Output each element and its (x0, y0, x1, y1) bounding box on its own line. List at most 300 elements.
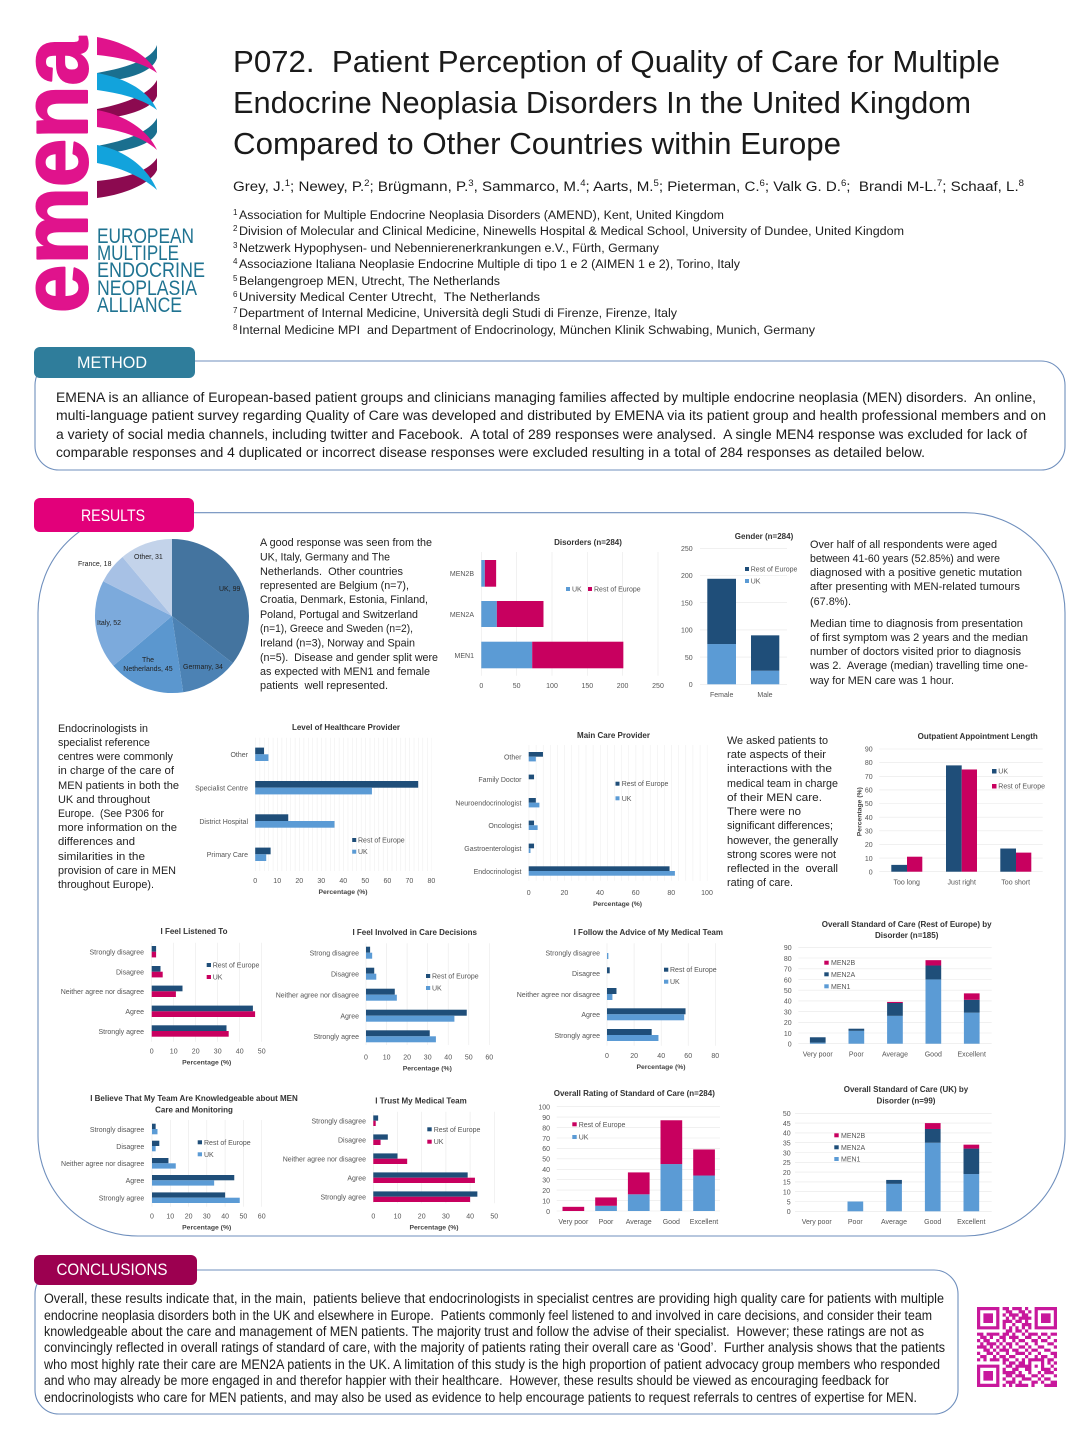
affiliations: Division of Molecular and Clinical Medicine, Ninewells Hospital & Medical School, University of Dundee, United Kingdom (239, 224, 904, 238)
conclusions text: endocrine neoplasia disorders both in the UK and elsewhere in Europe. Patients commonly feel listened to and involved in care decisions, and consider their team (44, 1308, 932, 1323)
chart: overall standard of care, UK: Very poor (802, 1219, 832, 1226)
chart: my team are knowledgeable: Percentage (%) (182, 1224, 231, 1232)
affiliations: University Medical Center Utrecht, The Netherlands (239, 290, 540, 304)
chart: disorders: 100 (546, 683, 558, 690)
pie chart: responses by country: Other, 31 (134, 554, 163, 561)
chart: overall standard of care, UK: 50 (783, 1111, 791, 1118)
method text: EMENA is an alliance of European-based patient groups and clinicians managing families affected by multiple endocrine neoplasia (MEN) disorders. An online, (56, 390, 1036, 405)
chart: overall standard of care, UK: MEN2B (841, 1133, 865, 1140)
chart: I trust my medical team: 30 (442, 1214, 450, 1220)
chart: overall rating of standard of care: 50 (542, 1157, 550, 1164)
chart: overall standard of care, UK: 35 (783, 1140, 791, 1148)
authors: 6 (841, 178, 846, 188)
chart: overall standard of care, UK: 30 (783, 1150, 791, 1157)
chart: overall rating of standard of care: UK (579, 1134, 589, 1142)
chart: I feel involved in care decisions: Strong disagree (310, 950, 359, 958)
chart: I follow the advice of my medical team: Rest of Europe (670, 967, 717, 974)
authors: 5 (654, 178, 659, 188)
logo text (97, 225, 205, 317)
authors: 8 (1019, 178, 1024, 188)
logo wordmark: emena (2, 36, 107, 313)
authors: ; Valk G. D. (765, 179, 841, 195)
chart: overall standard of care, UK: 10 (783, 1190, 791, 1196)
chart: my team are knowledgeable: I Believe That My Team Are Knowledgeable about MEN (90, 1094, 298, 1103)
chart: overall standard of care, rest of Europe: 70 (784, 967, 792, 974)
text: endocrinologists: more information on the (58, 822, 177, 834)
chart: my team are knowledgeable: 50 (240, 1214, 247, 1220)
chart: main care provider: 40 (596, 890, 604, 897)
authors: 7 (937, 178, 942, 188)
chart: outpatient appointment length: UK (998, 769, 1008, 776)
chart: I trust my medical team: I Trust My Medical Team (375, 1096, 467, 1106)
chart: I follow the advice of my medical team (517, 928, 723, 1071)
text: demographics: was 2. Average (median) travelling time one- (809, 660, 1028, 672)
chart: overall rating of standard of care: Excellent (690, 1219, 718, 1226)
method text (56, 390, 1046, 460)
chart: outpatient appointment length: 90 (865, 746, 873, 754)
logo: EMENA (2, 36, 205, 317)
chart: I feel involved in care decisions: 50 (465, 1054, 473, 1062)
chart: overall standard of care, rest of Europe: 40 (784, 999, 792, 1006)
chart: overall rating of standard of care: Average (626, 1219, 652, 1226)
chart: my team are knowledgeable: Agree (126, 1178, 144, 1185)
text: response summary: (n=5). Disease and gender split were (260, 652, 438, 664)
chart: my team are knowledgeable: 10 (166, 1214, 174, 1220)
chart: I follow the advice of my medical team: 80 (711, 1053, 719, 1060)
chart: level of healthcare provider: 30 (317, 878, 325, 885)
chart: main care provider: Main Care Provider (577, 731, 650, 740)
chart: overall rating of standard of care: 30 (542, 1178, 550, 1184)
panel: results (34, 498, 1065, 1236)
chart: I follow the advice of my medical team: 60 (684, 1053, 692, 1060)
chart: my team are knowledgeable: Care and Monitoring (155, 1106, 233, 1115)
text: rating aspects of care: rate aspects of their (727, 749, 826, 761)
chart: I follow the advice of my medical team: Percentage (%) (636, 1064, 686, 1071)
title: P072. Patient Perception of Quality of Care for Multiple (233, 44, 1000, 79)
chart: overall rating of standard of care: 40 (542, 1167, 550, 1174)
chart: main care provider: 0 (527, 890, 531, 897)
chart: my team are knowledgeable: 30 (203, 1214, 211, 1220)
chart: I feel involved in care decisions: 0 (364, 1054, 368, 1062)
chart: I feel involved in care decisions: Neither agree nor disagree (276, 992, 359, 1000)
chart: I trust my medical team: 10 (394, 1214, 401, 1220)
chart: disorders: 0 (479, 683, 483, 690)
chart: I feel involved in care decisions: I Feel Involved in Care Decisions (352, 928, 477, 937)
chart: I feel listened to: I Feel Listened To (161, 927, 228, 936)
chart: my team are knowledgeable: Neither agree nor disagree (61, 1161, 144, 1168)
method heading tab: METHOD (77, 353, 147, 372)
chart: main care provider: Family Doctor (478, 777, 522, 784)
chart: overall standard of care, UK: Disorder (n=99) (877, 1096, 936, 1106)
chart: overall standard of care, UK: 15 (783, 1180, 791, 1187)
affiliations: 7 (233, 306, 238, 315)
authors: 1 (285, 178, 290, 188)
chart: gender: 100 (681, 628, 693, 634)
chart: overall standard of care, UK: Poor (848, 1219, 863, 1226)
text: endocrinologists: MEN patients in both the (58, 780, 179, 792)
text: endocrinologists: UK and throughout (58, 794, 151, 806)
chart: outpatient appointment length: Too long (893, 880, 920, 887)
chart: I follow the advice of my medical team: UK (670, 979, 680, 986)
text: demographics: after presenting with MEN-related tumours (810, 581, 1020, 593)
chart: I feel listened to: 30 (214, 1048, 222, 1056)
chart: overall standard of care, UK: Excellent (957, 1219, 986, 1226)
authors: 4 (580, 178, 586, 188)
conclusions heading tab (34, 1255, 197, 1285)
chart: gender: UK (751, 578, 761, 586)
affiliations: 5 (233, 274, 238, 283)
chart: I follow the advice of my medical team: Neither agree nor disagree (517, 992, 600, 999)
chart: overall standard of care, rest of Europe: 90 (784, 945, 792, 952)
text: rating aspects of care: interactions with the (727, 763, 832, 775)
text: rating aspects of care: rating of care. (727, 877, 793, 889)
conclusions text: and who may already be more engaged in and therefor happier with their healthcare. However, these results should be viewed as encouraging feedback for (44, 1373, 889, 1388)
title: Endocrine Neoplasia Disorders In the United Kingdom (233, 85, 971, 120)
chart: overall standard of care, rest of Europe: Good (925, 1052, 942, 1058)
chart: overall standard of care, rest of Europe (784, 920, 992, 1058)
chart: overall rating of standard of care: Poor (599, 1219, 614, 1226)
method text: multi-language patient survey regarding Quality of Care was developed and distributed by EMENA via its patient group and health professional members and on (56, 408, 1046, 423)
chart: I trust my medical team: Strongly agree (320, 1194, 366, 1202)
chart: I trust my medical team (283, 1096, 498, 1232)
chart: I feel listened to (61, 927, 266, 1066)
chart: overall standard of care, UK: MEN2A (841, 1145, 865, 1152)
chart: main care provider: 20 (561, 890, 568, 897)
chart: I trust my medical team: Strongly disagree (312, 1118, 366, 1126)
chart: my team are knowledgeable: Rest of Europe (204, 1140, 251, 1147)
chart: overall rating of standard of care: 80 (542, 1125, 550, 1132)
panel: conclusions (34, 1255, 958, 1414)
conclusions text: convincingly reflected in overall ratings of standard of care, with the majority of patients rating their overall care as ‘Good’. Further analysis shows that the patients (44, 1340, 945, 1355)
affiliations: 2 (233, 224, 238, 233)
text: response summary (260, 537, 438, 692)
chart: outpatient appointment length: Outpatient Appointment Length (918, 732, 1038, 741)
chart: overall standard of care, rest of Europe: 80 (784, 956, 792, 963)
chart: overall standard of care, rest of Europe: 50 (784, 988, 792, 995)
authors: ; Pieterman, C. (659, 179, 760, 195)
chart: I trust my medical team: Percentage (%) (409, 1224, 459, 1232)
chart: I feel listened to: Rest of Europe (213, 962, 259, 970)
chart: level of healthcare provider: 60 (384, 878, 391, 885)
chart: overall standard of care, UK: MEN1 (841, 1156, 861, 1164)
authors: ; Schaaf, L. (942, 179, 1019, 195)
text: response summary: patients well represented. (260, 680, 388, 692)
chart: my team are knowledgeable (61, 1094, 298, 1232)
chart: outpatient appointment length: 80 (865, 760, 873, 767)
chart: main care provider: 60 (632, 890, 640, 897)
logo text: ENDOCRINE (97, 259, 205, 282)
chart: my team are knowledgeable: UK (204, 1152, 214, 1159)
chart: overall standard of care, rest of Europe: 60 (784, 977, 792, 984)
chart: overall rating of standard of care: 100 (538, 1104, 550, 1112)
chart: I feel involved in care decisions: Rest of Europe (432, 974, 479, 980)
chart: I feel listened to: Strongly disagree (90, 950, 144, 956)
chart: level of healthcare provider: 80 (428, 878, 435, 885)
chart: outpatient appointment length: Percentage (%) (856, 787, 864, 836)
chart: overall standard of care, UK: 5 (787, 1199, 791, 1206)
chart: main care provider: Endocrinologist (474, 869, 522, 876)
chart: I feel involved in care decisions: Strongly agree (313, 1034, 359, 1041)
chart: overall standard of care, rest of Europe: Excellent (957, 1052, 986, 1058)
chart: overall rating of standard of care: 90 (542, 1115, 550, 1122)
affiliations: 8 (233, 323, 238, 332)
chart: gender (681, 532, 797, 699)
chart: outpatient appointment length: Just right (947, 880, 976, 887)
chart: overall rating of standard of care: 20 (542, 1188, 550, 1195)
conclusions text: knowledgeable about the care and management of MEN patients. The majority trust and follow the advise of their specialist. However; these ratings are not as (44, 1324, 924, 1339)
text: demographics: of first symptom was 2 years and the median (810, 632, 1028, 644)
chart: I feel involved in care decisions: Disagree (331, 972, 359, 978)
chart: gender: 250 (681, 546, 693, 553)
text: demographics: number of doctors visited prior to diagnosis (810, 646, 1021, 658)
text: demographics: diagnosed with a positive genetic mutation (810, 567, 1022, 579)
authors: 2 (364, 178, 370, 188)
logo helix (97, 37, 157, 198)
title (233, 44, 1000, 161)
chart: overall standard of care, UK: Overall Standard of Care (UK) by (844, 1085, 969, 1094)
authors: 3 (468, 178, 474, 188)
chart: disorders: MEN2B (450, 571, 474, 578)
chart: overall standard of care, rest of Europe: 10 (784, 1031, 792, 1038)
affiliations: Netzwerk Hypophysen- und Nebennierenerkrankungen e.V., Fürth, Germany (239, 241, 660, 255)
text: rating aspects of care: however, the generally (727, 835, 838, 847)
chart: my team are knowledgeable: Disagree (116, 1144, 144, 1151)
chart: I trust my medical team: 0 (371, 1214, 375, 1220)
chart: my team are knowledgeable: 0 (150, 1214, 154, 1220)
text: demographics: Median time to diagnosis from presentation (810, 618, 1023, 630)
chart: overall rating of standard of care: Good (663, 1219, 680, 1226)
affiliations: Associazione Italiana Neoplasie Endocrine Multiple di tipo 1 e 2 (AIMEN 1 e 2), Torino, Italy (239, 257, 741, 271)
chart: overall rating of standard of care (538, 1089, 720, 1226)
text: demographics (809, 539, 1028, 687)
conclusions text: endocrinologists who care for MEN patients, and may also be used as evidence to help encourage patients to request referrals to centres of expertise for MEN. (44, 1390, 917, 1405)
chart: I feel listened to: Disagree (116, 970, 144, 976)
chart: I feel involved in care decisions: Agree (340, 1014, 359, 1020)
chart: I feel listened to: Strongly agree (98, 1029, 144, 1036)
chart: level of healthcare provider: 40 (339, 878, 347, 885)
chart: I follow the advice of my medical team: I Follow the Advice of My Medical Team (574, 928, 723, 937)
chart: I trust my medical team: 40 (466, 1214, 474, 1220)
text: rating aspects of care: There were no (727, 806, 801, 818)
chart: disorders: 250 (652, 683, 664, 690)
pie chart: responses by country: Germany, 34 (183, 664, 223, 671)
chart: main care provider: Neuroendocrinologist (455, 800, 522, 808)
chart: I follow the advice of my medical team: 0 (605, 1053, 609, 1060)
chart: gender: Male (757, 692, 773, 699)
chart: disorders: MEN1 (455, 653, 474, 660)
text: demographics: between 41-60 years (52.85%) and were (810, 553, 1000, 565)
text: rating aspects of care: significant differences; (727, 820, 833, 832)
chart: level of healthcare provider: District Hospital (199, 819, 248, 826)
chart: overall standard of care, rest of Europe: Disorder (n=185) (875, 931, 939, 940)
authors: 6 (760, 178, 765, 188)
text: response summary: Poland, Portugal and Switzerland (260, 609, 418, 621)
chart: I feel involved in care decisions: 30 (424, 1054, 432, 1062)
chart: outpatient appointment length: Rest of Europe (998, 784, 1045, 791)
affiliations: 4 (233, 257, 238, 266)
chart: main care provider: UK (622, 796, 632, 803)
chart: disorders: UK (572, 586, 582, 594)
chart: I follow the advice of my medical team: 20 (630, 1053, 638, 1060)
text: demographics: Over half of all respondents were aged (810, 539, 997, 551)
chart: I feel listened to: 20 (192, 1048, 200, 1056)
chart: I feel listened to: Percentage (%) (182, 1060, 231, 1066)
chart: overall standard of care, UK: 20 (783, 1170, 791, 1177)
chart: I feel listened to: 10 (170, 1048, 178, 1056)
chart: overall standard of care, rest of Europe: Overall Standard of Care (Rest of Europe) by (822, 920, 992, 929)
authors: ; Brandi M-L. (846, 179, 937, 195)
chart: level of healthcare provider: Specialist Centre (195, 786, 248, 792)
chart: I trust my medical team: Disagree (338, 1138, 366, 1144)
chart: my team are knowledgeable: 20 (185, 1214, 193, 1220)
authors: Grey, J. (233, 179, 282, 195)
chart: level of healthcare provider: Level of Healthcare Provider (292, 723, 400, 732)
text: rating aspects of care: reflected in the overall (727, 863, 838, 875)
chart: gender: 0 (689, 682, 693, 689)
chart: overall standard of care, rest of Europe: 20 (784, 1020, 792, 1027)
chart: disorders: 200 (617, 683, 629, 690)
chart: I trust my medical team: 50 (490, 1214, 498, 1220)
chart: I feel involved in care decisions: 20 (403, 1054, 411, 1062)
text: response summary: Ireland (n=3), Norway and Spain (260, 638, 415, 650)
chart: outpatient appointment length: 60 (865, 788, 873, 794)
text: endocrinologists: Endocrinologists in (58, 723, 148, 735)
chart: my team are knowledgeable: 60 (258, 1214, 266, 1220)
panel: method (34, 347, 1065, 470)
text: response summary: Croatia, Denmark, Estonia, Finland, (260, 594, 428, 606)
chart: I trust my medical team: Rest of Europe (434, 1127, 480, 1134)
chart: overall standard of care, UK: 0 (787, 1209, 791, 1216)
chart: overall standard of care, UK: 25 (783, 1160, 791, 1167)
chart: disorders (450, 538, 664, 690)
icon: QR code (977, 1307, 1057, 1387)
chart: I feel listened to: Agree (125, 1009, 144, 1016)
affiliations: 1 (233, 208, 238, 217)
logo text: ALLIANCE (97, 294, 182, 317)
conclusions text: Overall, these results indicate that, in the main, patients believe that endocrinologists in specialist centres are providing high quality care for patients with multiple (44, 1291, 944, 1306)
affiliations: 6 (233, 290, 238, 299)
chart: outpatient appointment length: 10 (865, 856, 873, 863)
chart: I feel listened to: Neither agree nor disagree (61, 989, 144, 996)
results heading tab: RESULTS (81, 506, 145, 525)
chart: level of healthcare provider: Primary Care (207, 852, 248, 859)
chart: I feel listened to: 0 (150, 1048, 154, 1056)
chart: gender: 150 (681, 600, 693, 608)
chart: overall rating of standard of care: 0 (546, 1209, 550, 1216)
chart: overall standard of care, UK (783, 1085, 992, 1226)
text: rating aspects of care: strong scores were not (727, 849, 837, 861)
chart: overall rating of standard of care: 70 (542, 1136, 550, 1143)
chart: gender: 200 (681, 573, 693, 580)
chart: I trust my medical team: Neither agree nor disagree (283, 1156, 366, 1164)
chart: overall standard of care, rest of Europe: 30 (784, 1009, 792, 1016)
authors: ; Aarts, M. (586, 179, 654, 195)
text: rating aspects of care: of their MEN care. (727, 792, 822, 804)
conclusions heading tab: CONCLUSIONS (56, 1260, 168, 1279)
text: endocrinologists: centres were commonly (58, 751, 173, 763)
text: demographics: way for MEN care was 1 hour. (809, 675, 954, 687)
chart: main care provider: 100 (701, 890, 713, 897)
affiliations: Internal Medicine MPI and Department of Endocrinology, München Klinik Schwabing, Munich, Germany (239, 323, 816, 337)
chart: outpatient appointment length: 20 (865, 842, 873, 849)
chart: level of healthcare provider: 10 (273, 878, 281, 885)
chart: overall standard of care, rest of Europe: MEN2A (831, 972, 855, 979)
chart: overall standard of care, UK: Good (924, 1219, 941, 1226)
text: endocrinologists: differences and (58, 836, 135, 848)
chart: main care provider (455, 731, 713, 908)
chart: outpatient appointment length: 30 (865, 828, 873, 836)
chart: I follow the advice of my medical team: Strongly disagree (546, 950, 600, 958)
chart: my team are knowledgeable: 40 (221, 1214, 229, 1220)
text: endocrinologists (58, 723, 179, 891)
chart: I follow the advice of my medical team: Agree (581, 1012, 600, 1019)
pie chart: responses by country (78, 539, 249, 693)
text: rating aspects of care: We asked patients to (727, 735, 828, 747)
text: endocrinologists: Europe. (See P306 for (58, 808, 164, 820)
text: endocrinologists: similarities in the (58, 851, 145, 863)
chart: disorders: 50 (513, 683, 521, 690)
chart: level of healthcare provider (195, 723, 435, 896)
conclusions text: who most highly rate their care are MEN2A patients in the UK. A limitation of this study is the high proportion of patient advocacy group members who responded (43, 1357, 940, 1372)
authors: ; Brügmann, P. (370, 179, 468, 195)
chart: main care provider: Rest of Europe (622, 781, 668, 788)
text: response summary: Netherlands. Other countries (260, 566, 403, 578)
chart: overall standard of care, rest of Europe: Very poor (803, 1052, 833, 1058)
text: demographics: (67.8%). (810, 596, 851, 608)
chart: overall rating of standard of care: Overall Rating of Standard of Care (n=284) (554, 1089, 715, 1098)
logo text: NEOPLASIA (97, 277, 197, 300)
chart: overall standard of care, UK: 40 (783, 1131, 791, 1138)
chart: outpatient appointment length: Too short (1001, 880, 1030, 887)
chart: outpatient appointment length: 50 (865, 801, 873, 808)
text: endocrinologists: in charge of the care of (58, 765, 175, 777)
text: response summary: A good response was seen from the (260, 537, 432, 549)
text: response summary: represented are Belgium (n=7), (260, 580, 409, 592)
chart: disorders: Disorders (n=284) (554, 538, 622, 547)
chart: I feel involved in care decisions: UK (432, 986, 442, 992)
chart: main care provider: Oncologist (488, 823, 522, 830)
pie chart: responses by country: UK, 99 (219, 586, 241, 593)
chart: disorders: Rest of Europe (594, 586, 641, 594)
chart: gender: 50 (685, 655, 693, 662)
affiliations: Belangengroep MEN, Utrecht, The Netherlands (239, 274, 500, 288)
chart: level of healthcare provider: 0 (253, 878, 257, 885)
chart: overall rating of standard of care: 60 (542, 1146, 550, 1153)
chart: main care provider: Gastroenterologist (464, 846, 522, 853)
chart: I trust my medical team: 20 (418, 1214, 426, 1220)
chart: outpatient appointment length: 40 (865, 815, 873, 822)
affiliations: Department of Internal Medicine, Università degli Studi di Firenze, Firenze, Italy (239, 306, 678, 320)
chart: I follow the advice of my medical team: 40 (657, 1053, 665, 1060)
chart: my team are knowledgeable: Strongly agree (99, 1196, 144, 1202)
chart: overall rating of standard of care: Very poor (558, 1219, 589, 1226)
chart: main care provider: 80 (667, 890, 675, 897)
chart: level of healthcare provider: 70 (406, 878, 413, 885)
affiliations (233, 208, 904, 337)
chart: disorders: MEN2A (450, 612, 474, 619)
chart: level of healthcare provider: UK (358, 849, 368, 856)
chart: disorders: 150 (581, 683, 593, 690)
logo text: EUROPEAN (97, 225, 194, 248)
text: rating aspects of care: medical team in charge (727, 778, 838, 790)
chart: outpatient appointment length: 70 (865, 774, 873, 781)
chart: I feel listened to: 40 (236, 1048, 244, 1056)
conclusions text (43, 1291, 945, 1405)
pie chart: responses by country: Italy, 52 (97, 620, 121, 627)
chart: I feel listened to: UK (213, 974, 223, 982)
chart: I trust my medical team: UK (434, 1139, 444, 1146)
chart: I feel involved in care decisions (276, 928, 493, 1072)
